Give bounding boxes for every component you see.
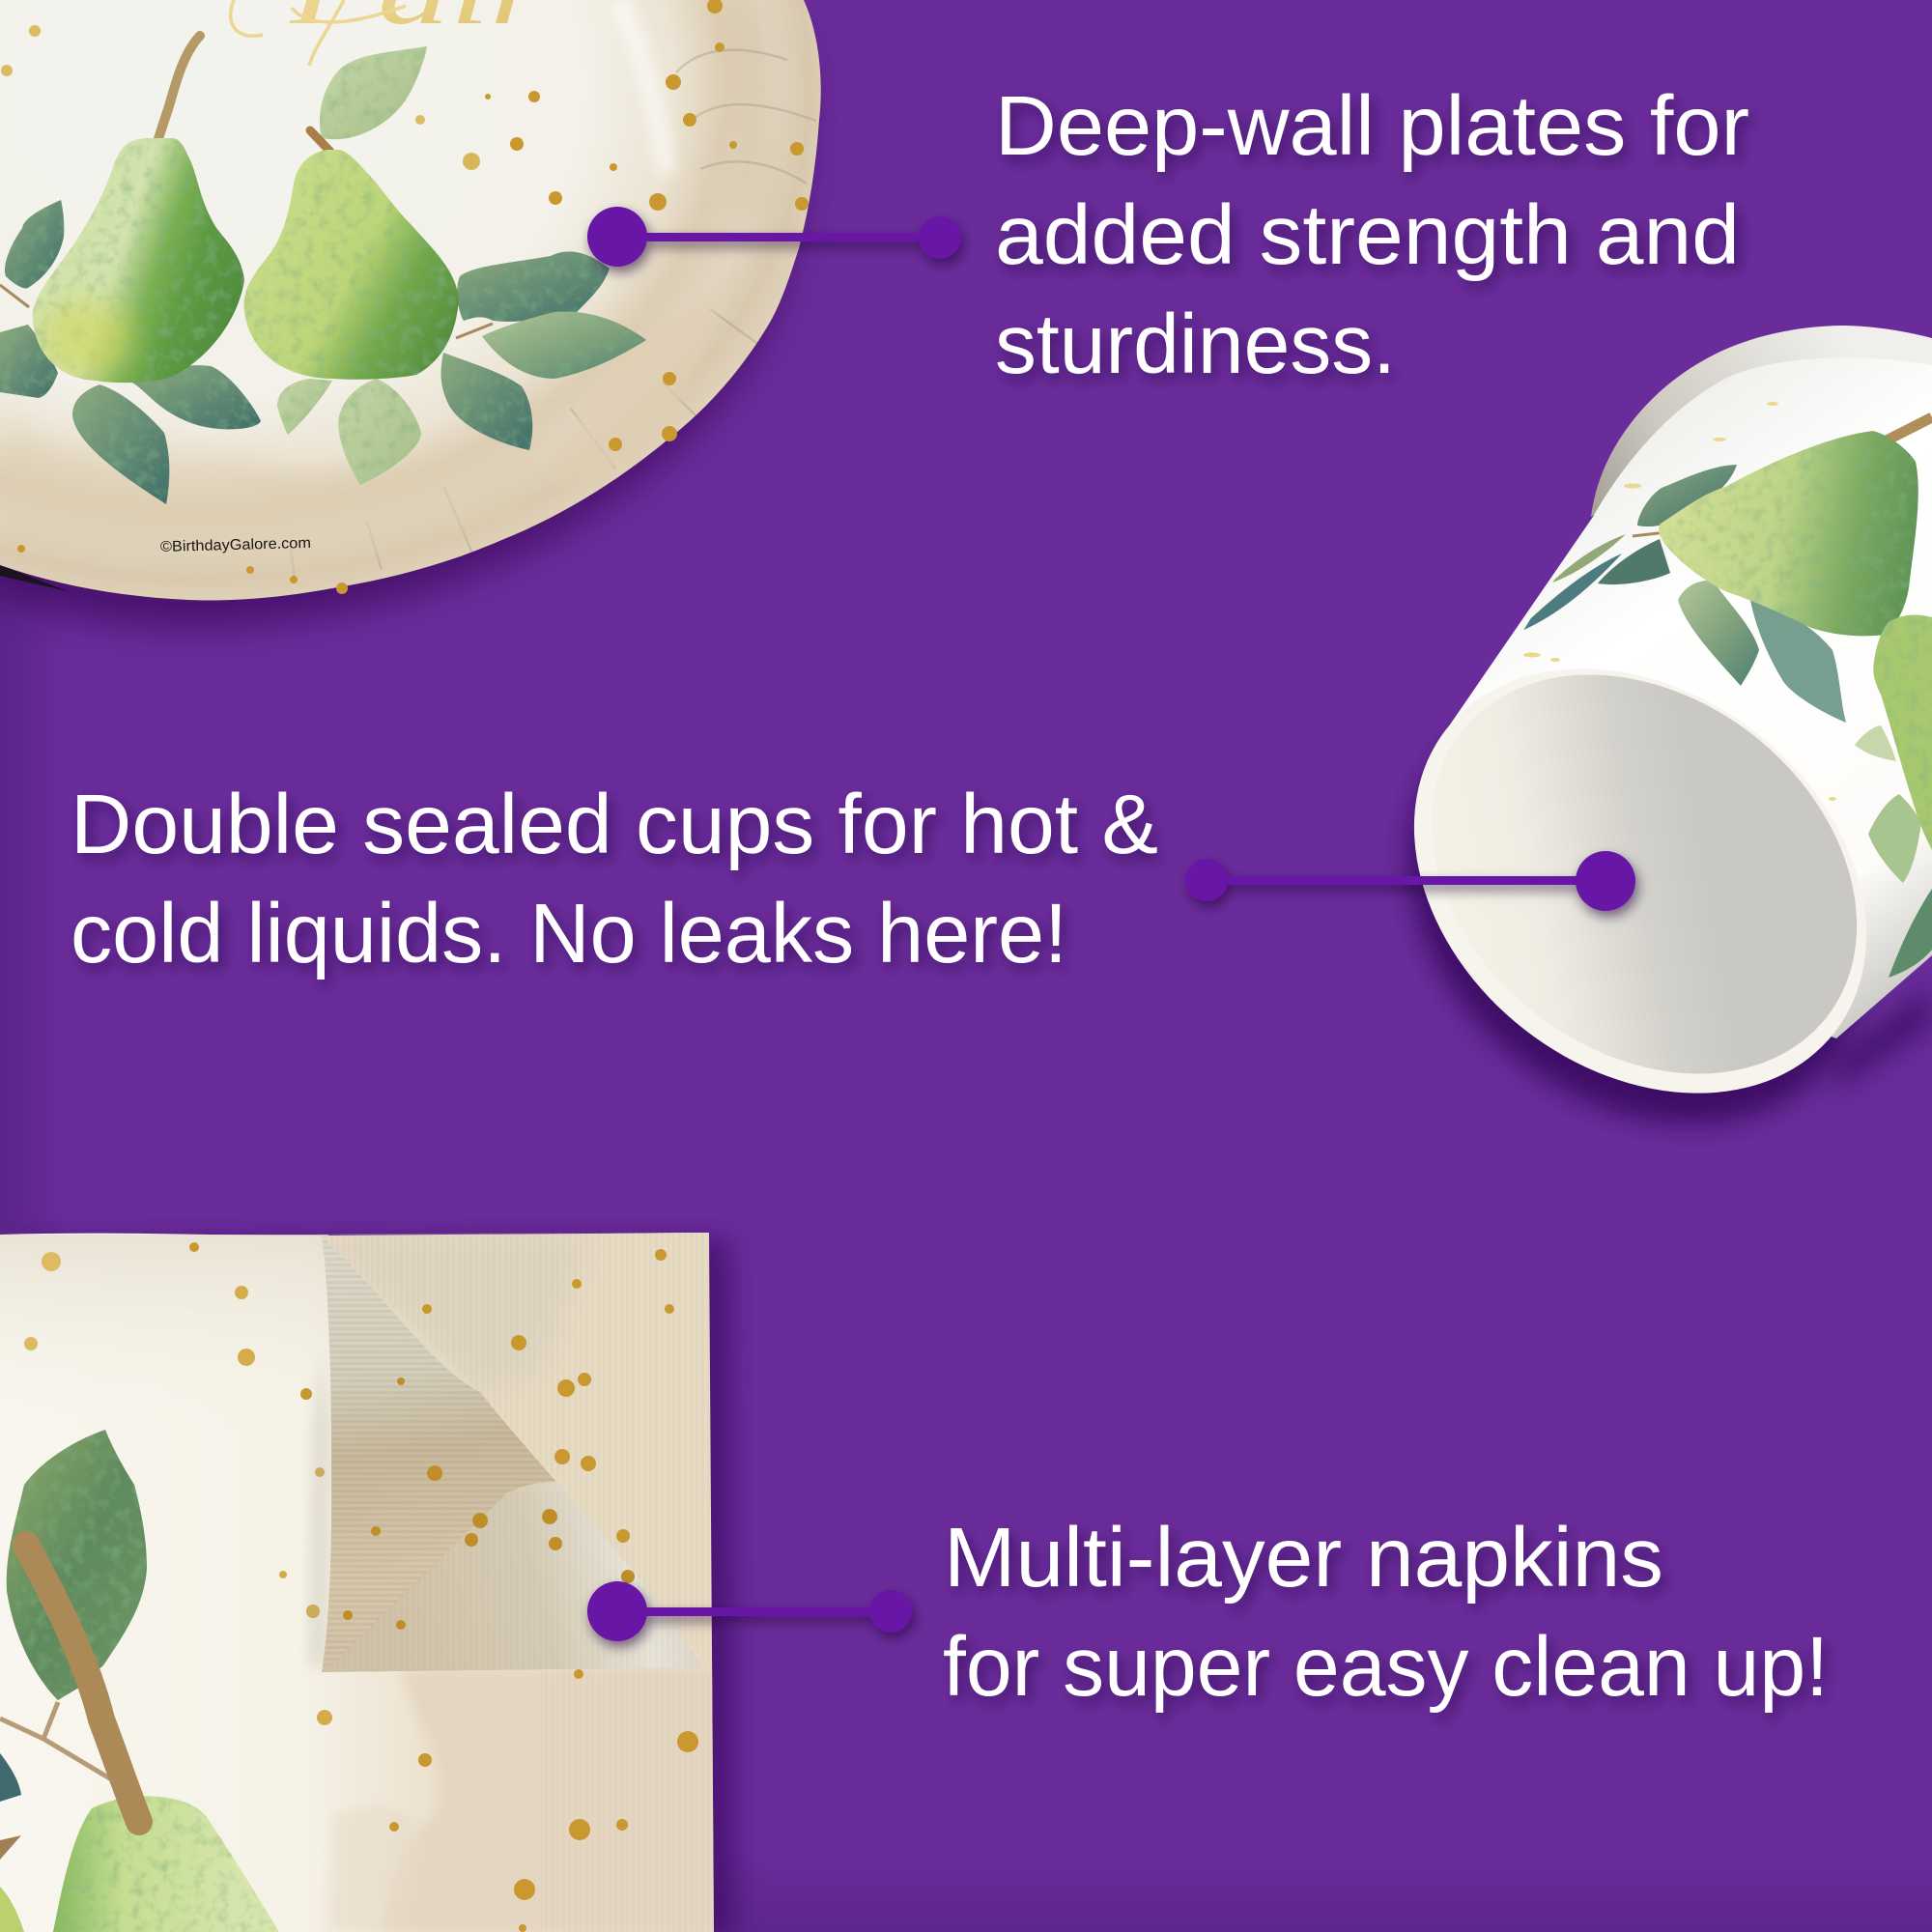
caption: napkins: for super easy clean up! (943, 1620, 1829, 1714)
fold gold dots (343, 1378, 635, 1630)
plate leaves (0, 46, 646, 504)
cup artwork (1523, 402, 1932, 978)
cup base outer rim (1330, 581, 1932, 1181)
fold cast shadow (307, 1352, 331, 1666)
napkin body (0, 1233, 714, 1932)
connector: napkin callout (587, 1581, 912, 1641)
panel: napkin (0, 1233, 735, 1932)
caption: napkins (943, 1511, 1829, 1714)
caption: plates: added strength and (995, 188, 1740, 282)
script flourishes (231, 0, 406, 66)
napkin small leaf (0, 1753, 21, 1802)
panel: paper plate (0, 0, 821, 627)
copyright text: ©BirthdayGalore.com (160, 535, 311, 555)
caption: cups: Double sealed cups for hot & (71, 778, 1158, 871)
napkin folded corner (322, 1236, 715, 1672)
connector: plate callout (587, 207, 961, 267)
cup side shadow (1835, 985, 1932, 1092)
napkin pear (53, 1796, 279, 1932)
plate dark edge (0, 565, 68, 591)
caption: plates: sturdiness. (995, 298, 1396, 391)
pear left on plate (33, 36, 244, 383)
napkin texture (0, 1233, 715, 1932)
plate body (0, 0, 821, 600)
background left vignette (0, 560, 68, 1236)
caption: cups (71, 778, 1158, 980)
plate rim details (0, 0, 816, 580)
caption: napkins: Multi-layer napkins (944, 1511, 1663, 1605)
caption: cups: cold liquids. No leaks here! (71, 887, 1067, 980)
caption: plates (995, 79, 1749, 391)
cup rim (1591, 326, 1932, 517)
connector: cup callout (1185, 851, 1635, 911)
napkin pear second (0, 1887, 24, 1932)
plate shadow (0, 27, 808, 627)
caption: plates: Deep-wall plates for (995, 79, 1749, 173)
napkin leaf (7, 1430, 147, 1700)
napkin gold dots (24, 1242, 698, 1932)
panel: paper cup (1393, 326, 1932, 1140)
napkin shadow (21, 1238, 735, 1932)
cup wall (1448, 357, 1932, 1038)
cup shadow (1324, 611, 1932, 1212)
background bottom vignette (0, 1845, 1932, 1932)
napkin twig (0, 1835, 21, 1860)
napkin pear stem (26, 1545, 139, 1822)
napkin branch (0, 1702, 113, 1780)
pear right on plate (244, 130, 459, 380)
plate gold dots (1, 0, 809, 594)
plate twigs (0, 285, 493, 338)
cup base inner disc (1352, 592, 1932, 1156)
